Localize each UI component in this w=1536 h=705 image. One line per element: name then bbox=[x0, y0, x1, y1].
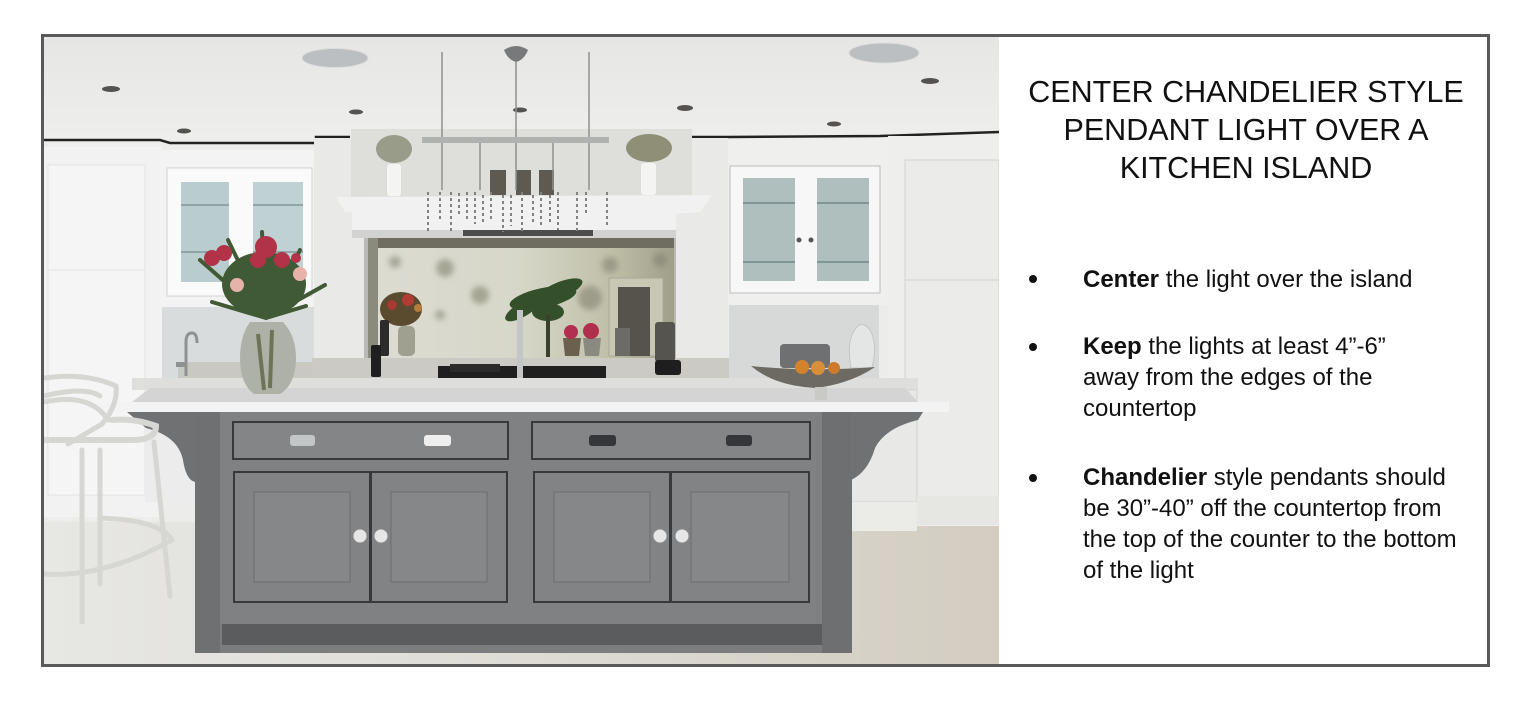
flower vase bouquet bbox=[200, 232, 325, 394]
door inner panels bbox=[254, 492, 789, 582]
bullet 3 text: of the light bbox=[1083, 557, 1194, 584]
right glass cabinet bbox=[728, 140, 888, 305]
drawer handles bbox=[290, 435, 752, 446]
bullet 2 text bbox=[1083, 333, 1386, 422]
bullet 1 marker bbox=[1029, 275, 1037, 283]
title: PENDANT LIGHT OVER A bbox=[1064, 113, 1428, 147]
island drawers bbox=[233, 422, 810, 459]
ceiling bbox=[44, 37, 999, 142]
title: CENTER CHANDELIER STYLE bbox=[1028, 75, 1464, 109]
ceiling cornice line bbox=[44, 132, 999, 143]
shelf candles bbox=[490, 170, 554, 195]
side counter bbox=[132, 378, 918, 390]
right alcove bbox=[729, 305, 879, 380]
toaster bbox=[780, 344, 830, 368]
floor bbox=[44, 522, 999, 664]
bullet 3 text: the top of the counter to the bottom bbox=[1083, 526, 1457, 553]
door knobs bbox=[353, 529, 689, 543]
left tall cabinet bbox=[44, 147, 162, 517]
chandelier pendant bbox=[422, 46, 609, 234]
left lower wall and tap bbox=[162, 307, 314, 378]
sink tap bbox=[483, 310, 557, 393]
title: KITCHEN ISLAND bbox=[1120, 151, 1372, 185]
left glass cabinet bbox=[160, 150, 314, 308]
mirror plant bbox=[502, 274, 585, 357]
splashback ledge bbox=[312, 358, 732, 378]
left base cabinet bbox=[145, 390, 195, 502]
fruit bowl bbox=[751, 360, 875, 400]
back wall bbox=[44, 140, 999, 540]
island body bbox=[195, 412, 852, 653]
ceiling speakers bbox=[302, 43, 919, 68]
mantel shelf bbox=[336, 195, 712, 238]
bullet 3 text: be 30”-40” off the countertop from bbox=[1083, 495, 1441, 522]
right tall cabinet bbox=[888, 136, 999, 526]
bullet 2 text: countertop bbox=[1083, 395, 1196, 422]
bullet 3 text: Chandelier style pendants should bbox=[1083, 464, 1446, 491]
bullet 1 text: Center the light over the island bbox=[1083, 266, 1413, 293]
bullet 2 text: away from the edges of the bbox=[1083, 364, 1372, 391]
small flower arrangement bbox=[371, 292, 422, 377]
chimney breast bbox=[314, 129, 728, 378]
bullet 3 text bbox=[1083, 464, 1457, 584]
bullet 2 marker bbox=[1029, 343, 1037, 351]
antique mirror splashback bbox=[368, 238, 674, 358]
right base cabinet bbox=[850, 390, 999, 531]
white ceramic vase bbox=[849, 324, 875, 368]
bullet 3 marker bbox=[1029, 474, 1037, 482]
counter pots bbox=[563, 322, 681, 375]
island corbels bbox=[127, 412, 923, 482]
shelf vases with flowers bbox=[376, 134, 672, 196]
island worktop bbox=[97, 388, 949, 412]
ceiling downlights bbox=[102, 78, 939, 134]
island cupboard doors bbox=[234, 472, 809, 602]
title bbox=[1028, 75, 1464, 185]
bar stool bbox=[44, 376, 172, 622]
bullet 2 text: Keep the lights at least 4”-6” bbox=[1083, 333, 1386, 360]
range cooker bbox=[438, 364, 606, 386]
photo: kitchen island with chandelier pendant bbox=[44, 37, 999, 664]
